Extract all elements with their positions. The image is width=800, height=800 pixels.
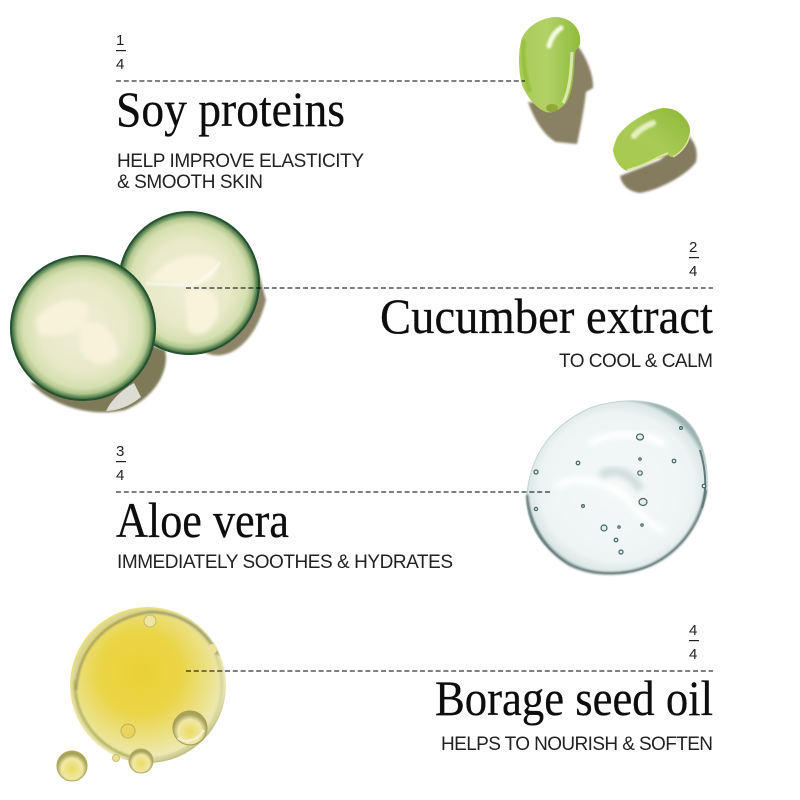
- panel: soy proteins: [116, 17, 697, 193]
- fraction: 4: [689, 263, 697, 280]
- fraction: 2: [689, 239, 697, 256]
- fraction: [116, 32, 126, 73]
- icon: soy beans: [519, 17, 697, 193]
- heading: Aloe vera: [116, 492, 289, 548]
- fraction: 4: [689, 622, 697, 639]
- description: & SMOOTH SKIN: [117, 172, 263, 193]
- description: HELPS TO NOURISH & SOFTEN: [441, 734, 713, 755]
- fraction: 4: [116, 467, 124, 484]
- description: TO COOL & CALM: [559, 351, 713, 372]
- connector line: [116, 491, 550, 493]
- fraction: 4: [689, 646, 697, 663]
- fraction: [689, 622, 699, 663]
- description: HELP IMPROVE ELASTICITY: [117, 151, 364, 172]
- connector line: [116, 80, 525, 82]
- icon: cucumber slices: [10, 211, 266, 412]
- description: IMMEDIATELY SOOTHES & HYDRATES: [117, 552, 453, 573]
- icon: aloe gel drop: [527, 401, 707, 573]
- connector line: [186, 670, 713, 672]
- description: [117, 151, 364, 193]
- connector line: [186, 287, 713, 289]
- panel: aloe vera: [116, 401, 707, 573]
- fraction: 4: [116, 56, 124, 73]
- heading: Soy proteins: [116, 81, 345, 137]
- icon: oil droplets: [57, 607, 226, 781]
- panel: cucumber extract: [10, 211, 713, 412]
- fraction: [689, 239, 699, 280]
- heading: Cucumber extract: [380, 288, 713, 344]
- heading: Borage seed oil: [435, 670, 713, 726]
- panel: borage seed oil: [57, 607, 713, 781]
- fraction: 3: [116, 443, 124, 460]
- fraction: 1: [116, 32, 124, 49]
- fraction: [116, 443, 126, 484]
